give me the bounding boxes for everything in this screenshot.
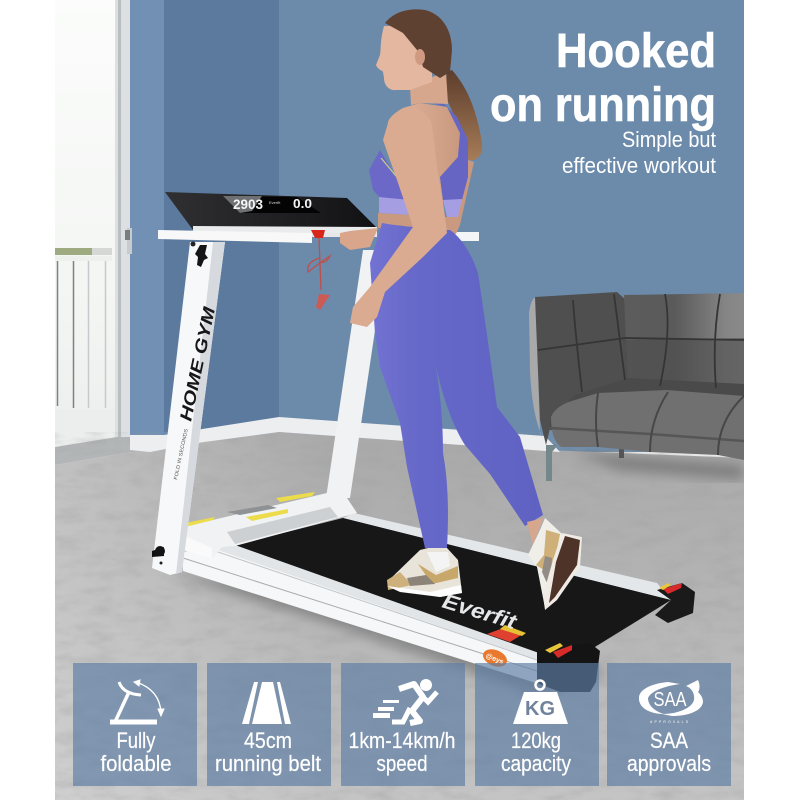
leggings (370, 223, 543, 548)
label: SAA (650, 728, 688, 753)
icon: folding treadmill (110, 680, 164, 722)
console (165, 192, 376, 230)
headline: Hooked (556, 25, 716, 78)
front side rail (183, 544, 539, 684)
label: speed (376, 751, 428, 776)
midriff (378, 213, 454, 230)
front upright with HOME GYM: FOLD IN SECONDS (173, 428, 190, 480)
folding knobs (195, 245, 208, 267)
treadmill (152, 192, 695, 695)
icon: SAA mark (639, 680, 703, 724)
belt brand: Everfit (440, 590, 520, 634)
label (501, 728, 571, 776)
label: 1km-14km/h (348, 728, 456, 753)
handlebar (158, 226, 479, 243)
icon: SAA mark: SAA (654, 689, 687, 711)
far side rail (343, 513, 671, 600)
orange brand badge (483, 649, 507, 667)
front end cap (537, 643, 600, 692)
panel: speed (341, 663, 465, 786)
icon: belt road (242, 682, 291, 724)
sofa (529, 292, 745, 481)
subtitle: Simple but (622, 127, 716, 152)
head (376, 26, 432, 90)
motor cover (185, 492, 357, 552)
icon: runner (373, 679, 437, 723)
back upright (326, 250, 375, 498)
panel: fully foldable (73, 663, 197, 786)
safety key and cord (308, 230, 330, 310)
icon: KG weight: KG (525, 698, 555, 720)
rear end cap (655, 583, 695, 623)
front upright with HOME GYM: HOME GYM (176, 304, 219, 423)
label: Fully (116, 728, 156, 753)
label: foldable (100, 751, 172, 776)
baseboard (130, 417, 560, 452)
title (490, 25, 716, 178)
far side arm strip (450, 160, 474, 234)
front shoe (387, 548, 462, 597)
label: 120kg (511, 728, 561, 753)
runner (340, 9, 582, 610)
neck (410, 72, 448, 105)
front upright with HOME GYM (152, 242, 225, 575)
label: running belt (215, 751, 321, 776)
label (215, 728, 321, 776)
rear shoe (527, 518, 582, 610)
label: approvals (627, 751, 711, 776)
label (348, 728, 456, 776)
orange brand badge: @eys (485, 653, 504, 666)
panel: capacity (475, 663, 599, 786)
floor (55, 432, 744, 800)
far arm (340, 228, 378, 250)
running belt (235, 518, 671, 653)
sports top (369, 100, 468, 217)
label (100, 728, 172, 776)
torso and back (403, 103, 460, 216)
console: 2903 (233, 196, 263, 212)
icon: SAA mark: APPROVALS (650, 720, 689, 724)
window (55, 0, 142, 465)
panel: SAA approvals (607, 663, 731, 786)
panel: running belt (207, 663, 331, 786)
upper arm (350, 108, 447, 327)
subtitle second line: effective workout (562, 153, 716, 178)
treadmill shadow (170, 575, 610, 695)
headline second line: on running (490, 79, 716, 132)
console: 0.0 (293, 196, 312, 211)
label (627, 728, 711, 776)
label: 45cm (244, 728, 292, 753)
hair (385, 9, 452, 78)
wall (129, 0, 744, 452)
ear (415, 49, 425, 65)
ponytail (446, 70, 482, 160)
label: capacity (501, 751, 571, 776)
safety stickers (487, 583, 682, 658)
console: Everfit (269, 200, 281, 205)
